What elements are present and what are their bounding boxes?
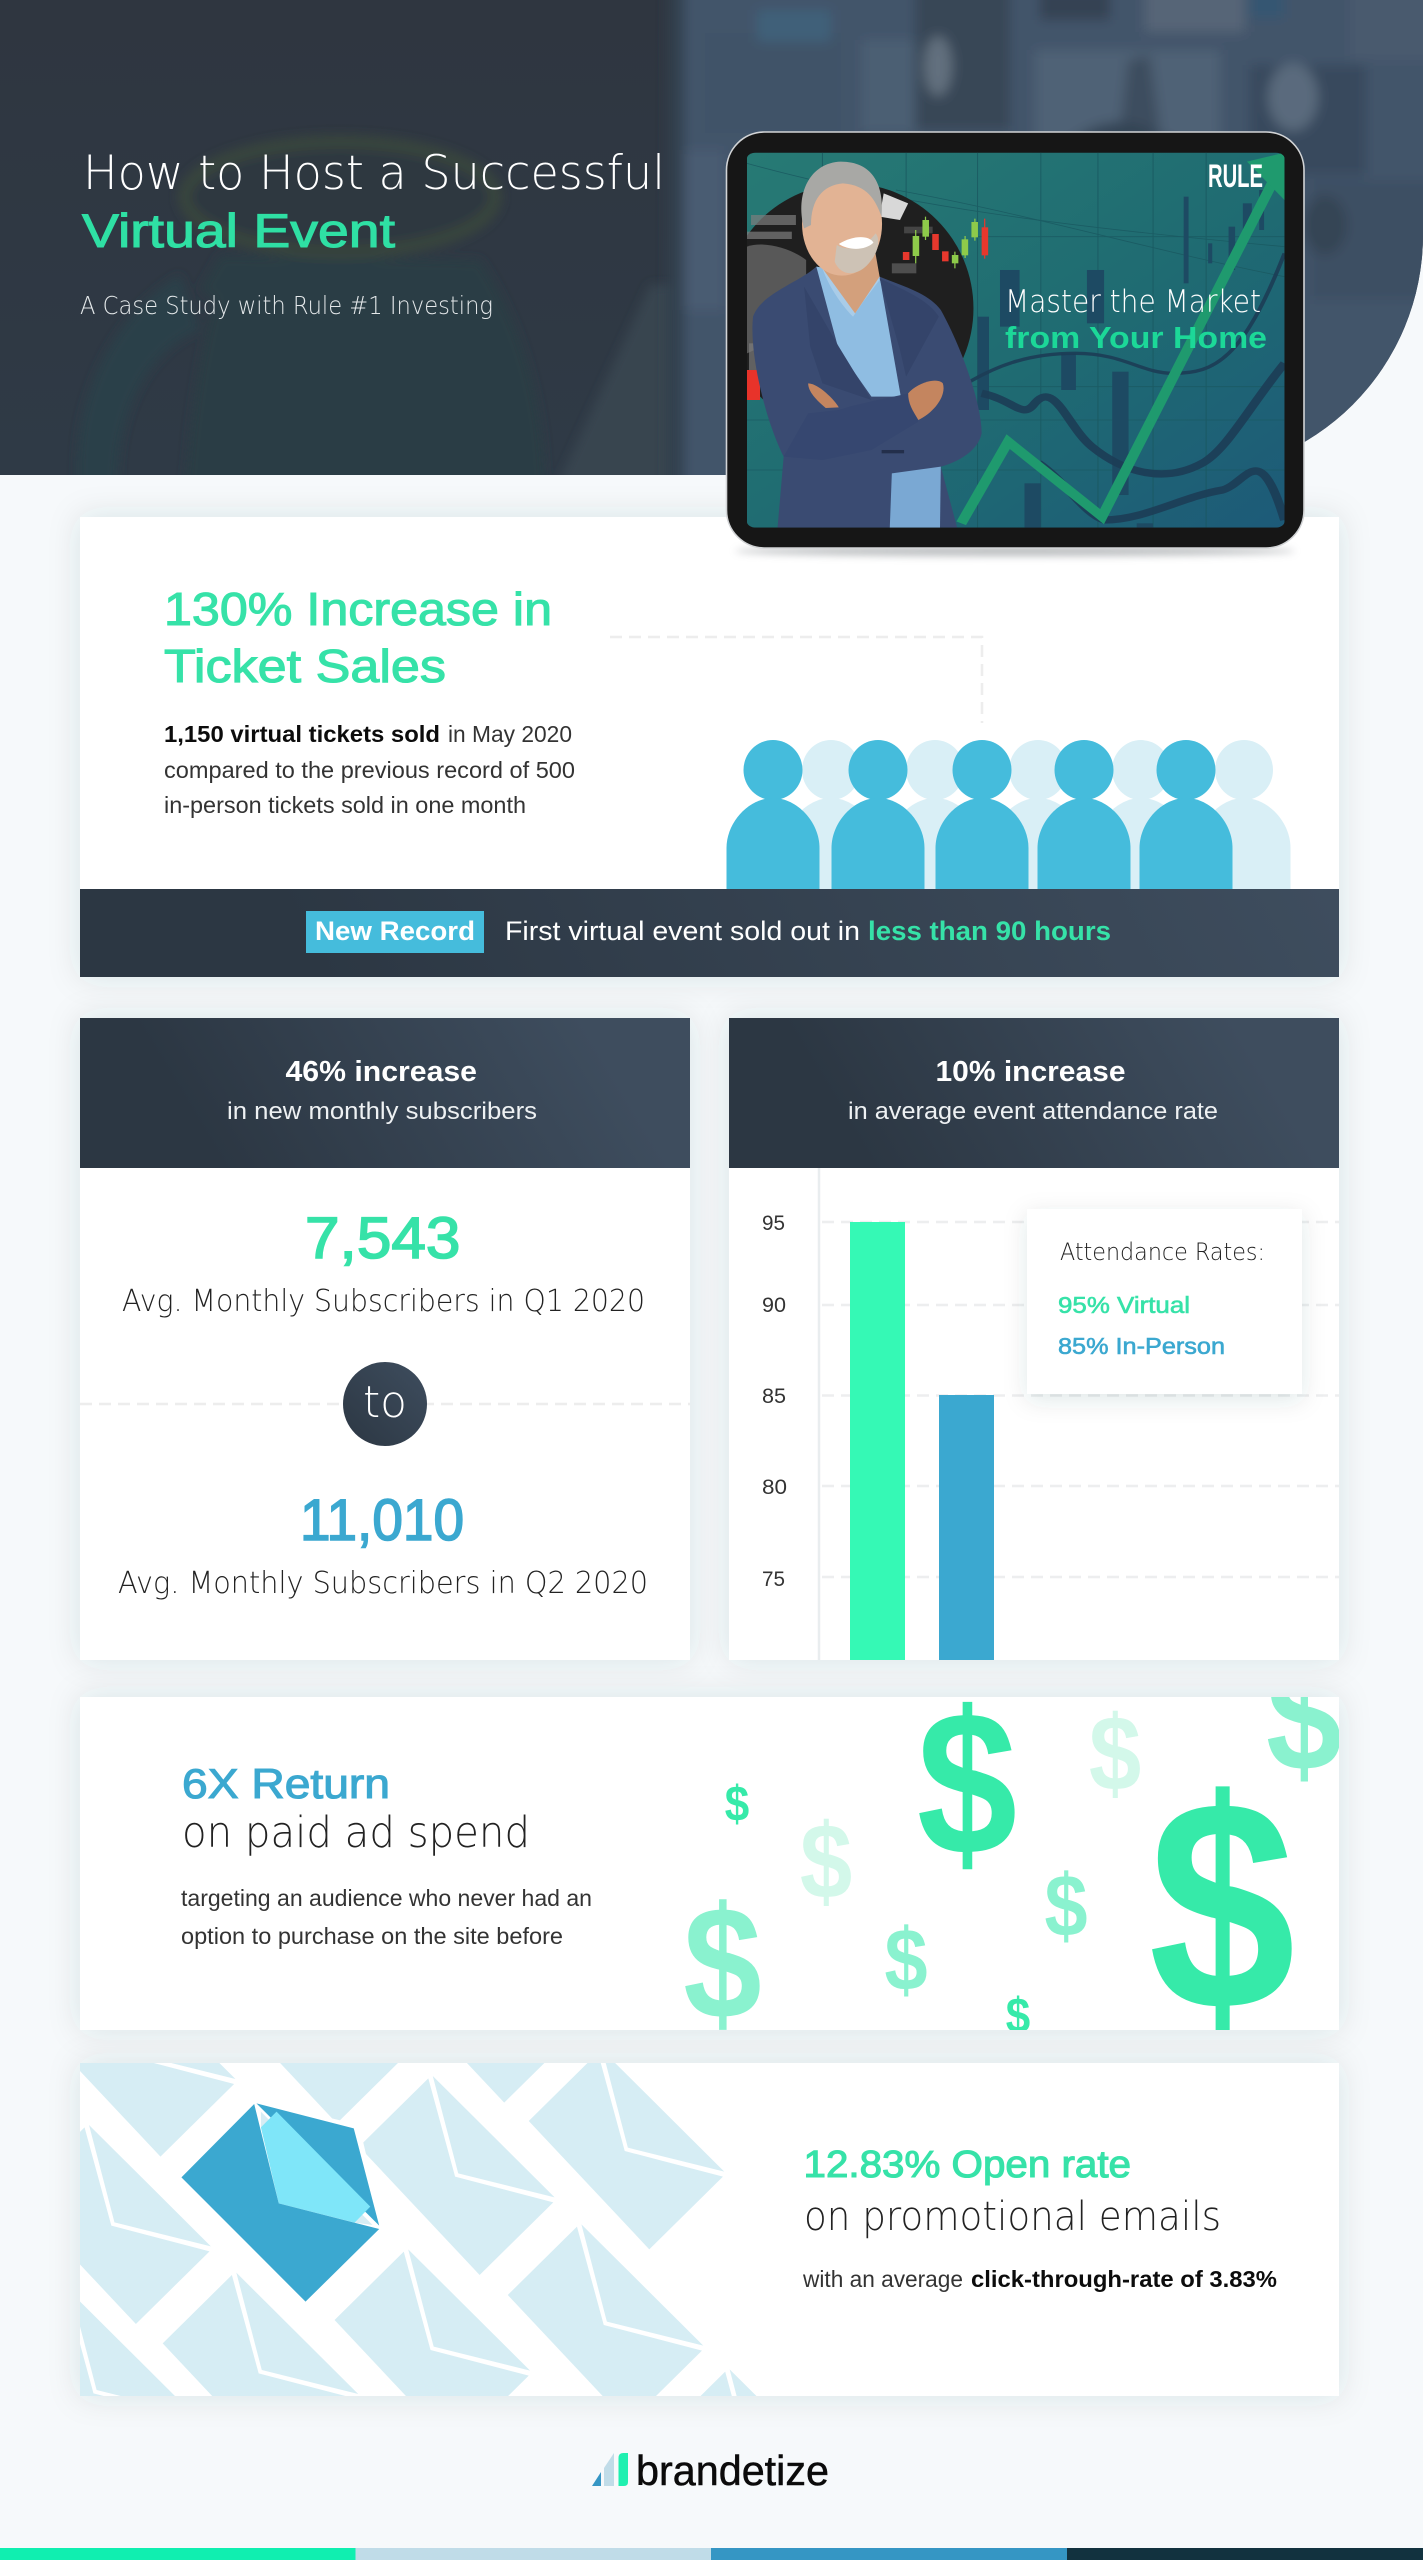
subscribers header: 46% increase (286, 1056, 477, 1088)
icons: dollar signs: $ (1089, 1694, 1141, 1813)
icons: dollar signs: $ (800, 1802, 852, 1921)
subscribers header: in new monthly subscribers (227, 1098, 537, 1125)
axis labels (762, 1212, 787, 1591)
tablet screen (724, 153, 1284, 528)
callout: attendance rates: 85% In-Person (1058, 1333, 1225, 1359)
heading: ticket sales: Ticket Sales (164, 640, 446, 692)
stat: Q1 subscribers: 7,543 (305, 1206, 460, 1271)
attendance header: in average event attendance rate (848, 1098, 1218, 1125)
photo circle (747, 187, 974, 400)
stat: Q1 subscribers: Avg. Monthly Subscribers in Q1 2020 (122, 1284, 645, 1319)
callout: attendance rates: 95% Virtual (1058, 1292, 1190, 1318)
subscribers header (80, 1018, 690, 1168)
axis labels: 75 (762, 1568, 785, 1591)
axis labels: 85 (762, 1385, 786, 1408)
panel: subscribers (80, 1018, 690, 1660)
banner text: less than 90 hours (868, 916, 1111, 946)
heading: ticket sales (164, 583, 552, 692)
stat: Q2 subscribers: 11,010 (300, 1488, 464, 1553)
heading: open rate: on promotional emails (804, 2194, 1221, 2240)
heading: open rate: 12.83% Open rate (804, 2144, 1131, 2186)
icons: dollar signs: $ (884, 1910, 928, 2009)
heading: ticket sales: 130% Increase in (164, 583, 552, 635)
bar chart (762, 1168, 1339, 1660)
tablet headline (1005, 284, 1267, 355)
tablet (724, 132, 1304, 556)
open rate body text (802, 2266, 1277, 2292)
people icons: audience (726, 740, 1290, 889)
candlesticks (903, 217, 988, 268)
ad return body text: targeting an audience who never had an (181, 1885, 592, 1911)
icons: dollar signs: $ (1006, 1987, 1030, 2044)
new record badge (306, 911, 484, 953)
panel: ad return (70, 1688, 1348, 2040)
heading: ad return: 6X Return (182, 1760, 390, 1807)
logo: brandetize: brandetize (636, 2447, 829, 2494)
banner text: First virtual event sold out in (505, 916, 860, 946)
new record badge: New Record (315, 916, 475, 946)
callout: attendance rates: Attendance Rates: (1060, 1238, 1265, 1266)
hero title: How to Host a Successful (83, 146, 665, 201)
tablet headline: from Your Home (1005, 320, 1267, 355)
axis labels: 80 (762, 1476, 787, 1499)
panel: attendance (729, 1018, 1339, 1660)
heading: ad return: on paid ad spend (182, 1808, 530, 1858)
callout: attendance rates (1027, 1209, 1302, 1394)
open rate body text: with an average (802, 2266, 963, 2292)
panel: ticket sales card (80, 517, 1339, 977)
icons: dollar signs: $ (1149, 1737, 1295, 2073)
person portrait (752, 162, 982, 528)
hero title: Virtual Event (82, 204, 395, 257)
new record banner (80, 889, 1339, 977)
ticket sales body text: 1,150 virtual tickets sold (164, 721, 440, 747)
panel: email open rate (70, 2054, 1348, 2406)
hero background (0, 0, 1423, 500)
axis labels: 90 (762, 1294, 786, 1317)
stat: Q1 subscribers (122, 1206, 645, 1319)
ad return body text: option to purchase on the site before (181, 1923, 563, 1949)
hero subtitle: A Case Study with Rule #1 Investing (80, 291, 493, 320)
hero title (82, 146, 665, 257)
icons: dollar signs (683, 1630, 1342, 2073)
icons: dollar signs: $ (725, 1775, 749, 1832)
ticket sales body text: compared to the previous record of 500 (164, 757, 575, 783)
tablet logo: RULE: RULE (1208, 158, 1263, 194)
ticket sales body text: in-person tickets sold in one month (164, 792, 526, 818)
to badge (343, 1362, 427, 1446)
icons: dollar signs: $ (1266, 1630, 1342, 1803)
envelope pattern (80, 2063, 756, 2396)
stat: Q2 subscribers (118, 1488, 648, 1601)
mug and laptop (566, 286, 666, 475)
attendance header (729, 1018, 1339, 1168)
icon: blue envelope (177, 2100, 384, 2307)
axis labels: 95 (762, 1212, 785, 1235)
attendance header: 10% increase (936, 1056, 1126, 1088)
heading: ad return (182, 1760, 530, 1858)
footer colour strip (0, 2548, 1423, 2560)
ticket sales body text: in May 2020 (448, 721, 572, 747)
ad return body text (181, 1885, 592, 1949)
stat: Q2 subscribers: Avg. Monthly Subscribers in Q2 2020 (118, 1566, 648, 1601)
heading: open rate (804, 2144, 1221, 2240)
icons: dollar signs: $ (1044, 1856, 1088, 1955)
banner text (505, 916, 1111, 946)
tablet headline: Master the Market (1005, 284, 1261, 320)
icons: dollar signs: $ (917, 1668, 1017, 1898)
ticket sales body text (164, 721, 575, 818)
icons: dollar signs: $ (683, 1874, 762, 2052)
green arrow (961, 177, 1276, 523)
to badge: to (363, 1377, 407, 1428)
open rate body text: click-through-rate of 3.83% (971, 2266, 1277, 2292)
